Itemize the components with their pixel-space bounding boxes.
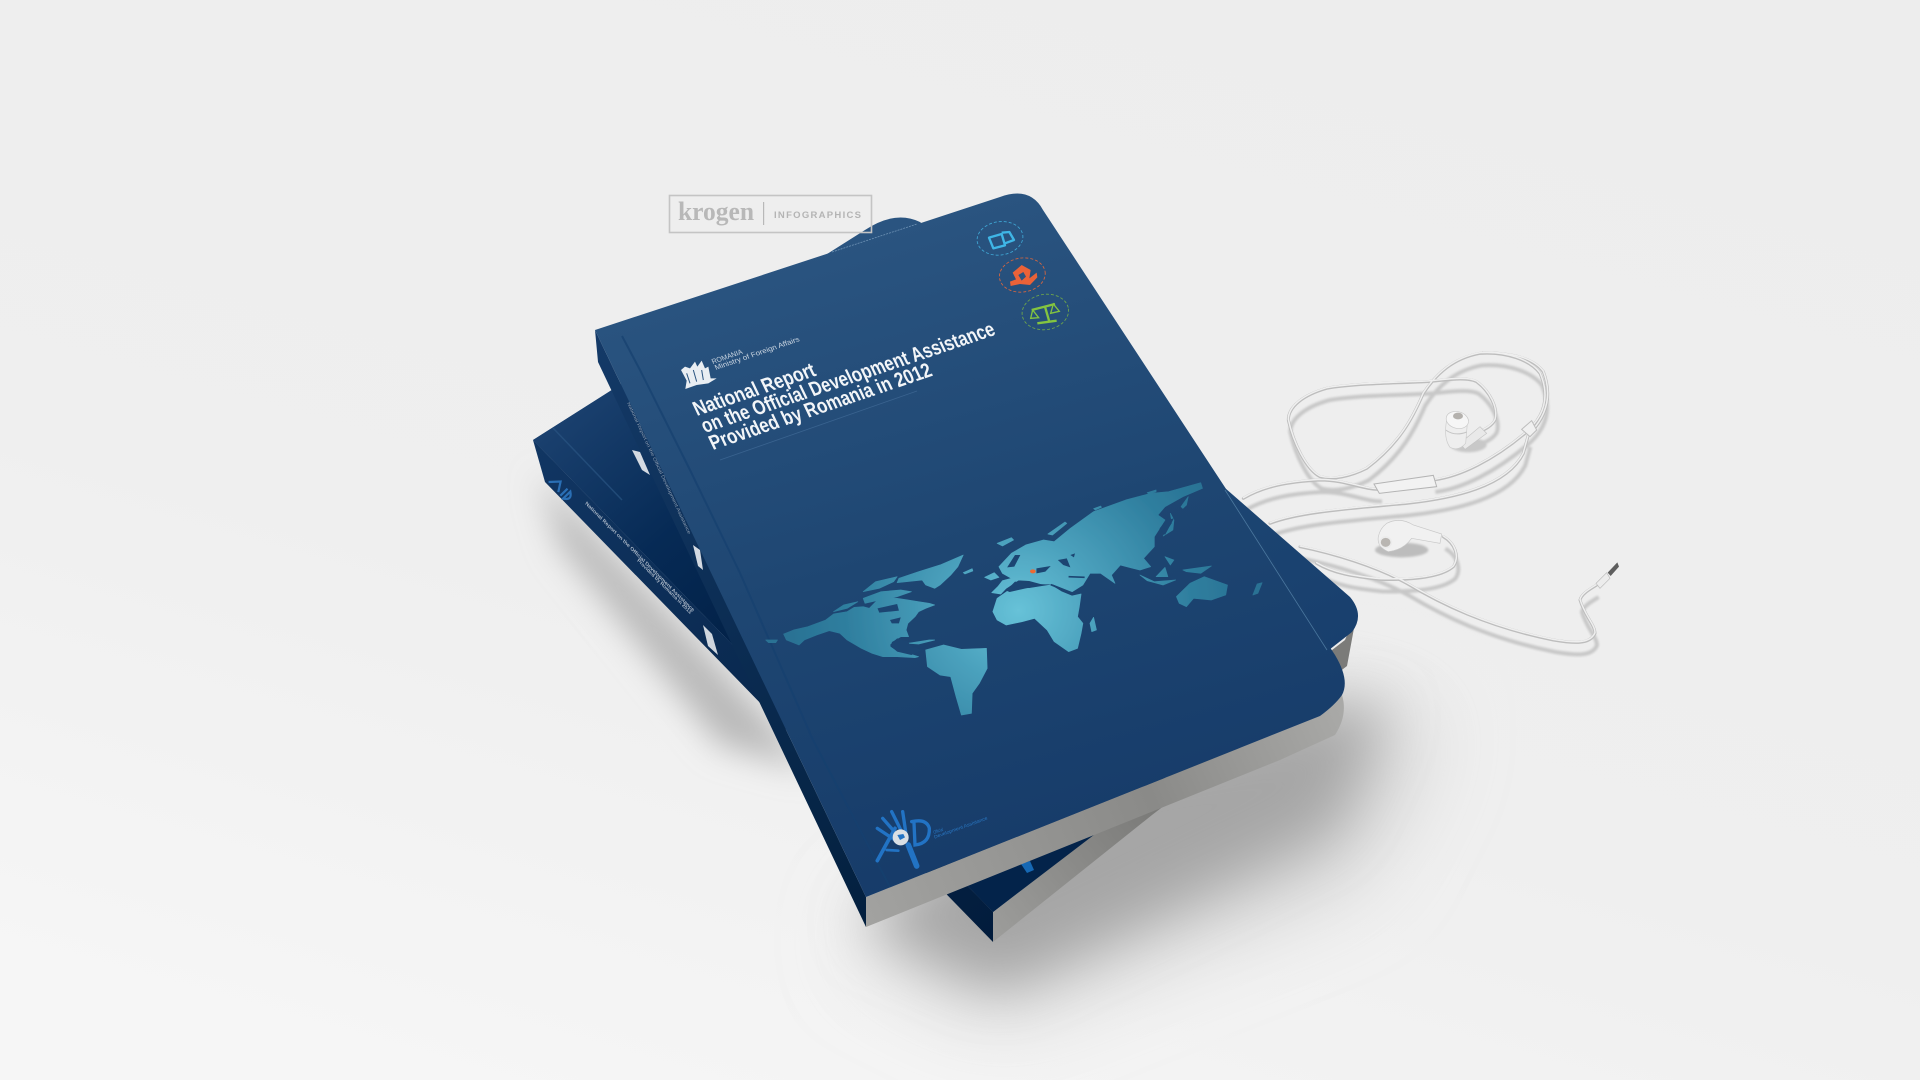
icon: scales badge: [1020, 291, 1071, 333]
Red Sea and gulf: [1051, 577, 1085, 593]
cables: [1243, 352, 1597, 642]
inline remote control and splitter: [1374, 421, 1537, 493]
krogen infographics logo: [670, 196, 872, 232]
lower book spine title: Provided by Romania in 2012: [636, 558, 692, 616]
top book spine title: National Report on the Official Development Assistance: [626, 401, 692, 535]
hinge crease: [622, 336, 890, 887]
lower book spine: [533, 440, 993, 942]
lower book page block: [993, 612, 1357, 942]
title: National Report: [689, 359, 819, 421]
New Zealand: [1253, 583, 1262, 595]
Arctic islands: [834, 577, 911, 612]
lower book hinge crease: [553, 428, 622, 500]
earphone cable shadows: [1245, 365, 1599, 654]
Madagascar: [1090, 617, 1096, 632]
top book cover: [595, 194, 1345, 897]
top book spine: [595, 330, 866, 927]
hand and letters: [877, 812, 929, 866]
lower book shaded area: [533, 372, 1120, 912]
logo frame: [670, 196, 872, 232]
world map: [766, 483, 1262, 715]
globe: [893, 829, 909, 845]
icon: book badge: [975, 219, 1025, 258]
earphones: [1243, 352, 1619, 654]
AID text: Development Assistance: [933, 815, 989, 840]
earbud lower: [1375, 520, 1442, 557]
lower book cover: [533, 218, 1358, 912]
book shadow on the surface: [540, 475, 1425, 1010]
Eurasia: [992, 483, 1202, 594]
Romania marker: [1030, 569, 1036, 573]
title underline: [720, 391, 917, 460]
Japan and Kamchatka: [1163, 497, 1188, 536]
South America: [926, 645, 987, 715]
divider: [763, 202, 764, 225]
cover top edge highlight: [832, 224, 917, 252]
krogen wordmark: krogen: [678, 197, 755, 226]
top book: [595, 194, 1345, 927]
audio jack: [1596, 562, 1619, 588]
Caribbean: [908, 569, 973, 644]
Africa: [993, 585, 1083, 652]
lower book: [533, 218, 1358, 942]
infographics label: INFOGRAPHICS: [774, 210, 861, 221]
ministry text: ROMANIA: [710, 347, 744, 366]
Iceland: [997, 538, 1014, 546]
AID logo: [877, 812, 989, 866]
AID text: Official: [933, 827, 944, 835]
government logo: [681, 334, 801, 389]
Australia: [1176, 577, 1227, 607]
Britain: [985, 573, 999, 580]
title: Provided by Romania in 2012: [705, 359, 936, 455]
lower book spine crest: [703, 625, 718, 655]
lower book small cover mark: [1021, 861, 1034, 873]
title: on the Official Development Assistance: [697, 318, 999, 438]
cover right edge highlight: [1225, 490, 1327, 650]
Greenland: [897, 555, 963, 588]
icon: hands and house badge: [997, 255, 1047, 295]
North America: [766, 597, 935, 658]
top book page block: [866, 695, 1344, 927]
Arctic Russia islands: [1048, 490, 1156, 535]
lower book spine title: National Report on the Official Development Assistance: [584, 501, 695, 614]
icon: coat of arms: [681, 361, 717, 389]
Southeast Asia islands: [1140, 557, 1211, 585]
lower book spine logo: [548, 476, 573, 501]
ministry text: Ministry of Foreign Affairs: [713, 334, 801, 372]
earbud upper: [1444, 409, 1487, 452]
seas and lakes: [877, 518, 1174, 655]
top book spine crest marks: [632, 450, 703, 570]
